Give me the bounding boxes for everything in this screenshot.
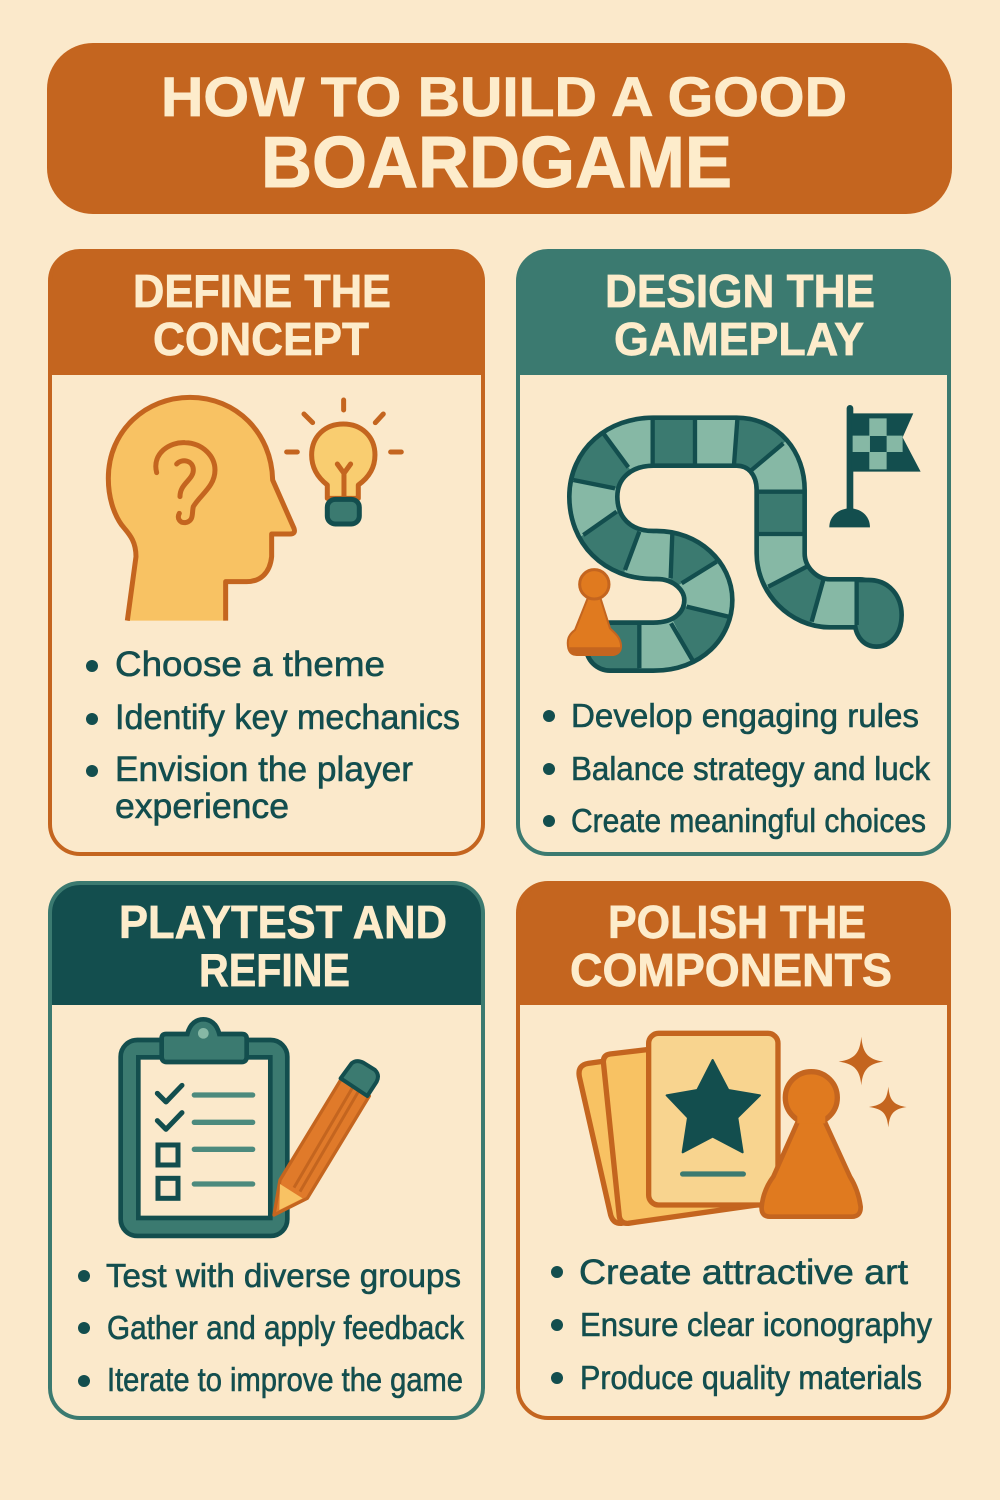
icon: head with question mark <box>108 397 294 621</box>
title banner <box>47 43 952 214</box>
bullet list: playtest and refine: Iterate to improve the game <box>107 1361 463 1398</box>
icon: clipboard checklist <box>121 1019 287 1236</box>
bullet list: define the concept: experience <box>115 787 289 826</box>
bullet list: playtest and refine <box>78 1257 464 1398</box>
panel: polish the components <box>518 883 949 1418</box>
heading: polish the components: COMPONENTS <box>570 944 892 996</box>
bullet list: define the concept <box>86 645 460 826</box>
panel: playtest and refine <box>50 883 483 1418</box>
title banner: HOW TO BUILD A GOOD <box>161 65 847 128</box>
bullet list: design the gameplay: Develop engaging rules <box>571 697 919 734</box>
heading: playtest and refine <box>119 896 447 996</box>
heading: playtest and refine: REFINE <box>199 944 350 996</box>
bullet list: design the gameplay: Balance strategy and luck <box>571 750 930 787</box>
heading: playtest and refine: PLAYTEST AND <box>119 896 447 948</box>
title banner: BOARDGAME <box>261 123 732 203</box>
panel: define the concept <box>50 251 483 854</box>
icon: light bulb <box>287 400 401 524</box>
heading: design the gameplay: DESIGN THE <box>605 265 875 317</box>
bullet list: playtest and refine: Test with diverse groups <box>106 1257 461 1294</box>
bullet list: polish the components <box>551 1253 932 1396</box>
bullet list: polish the components: Ensure clear iconography <box>580 1306 932 1343</box>
heading: polish the components <box>570 896 892 996</box>
bullet list: design the gameplay: Create meaningful choices <box>571 802 926 839</box>
icon: checkered flag <box>829 408 921 527</box>
icon: orange pawn and sparkles <box>762 1037 907 1217</box>
icon: pencil <box>274 1061 378 1215</box>
heading: define the concept: DEFINE THE <box>133 265 391 317</box>
heading: design the gameplay: GAMEPLAY <box>614 313 864 365</box>
panel: design the gameplay <box>518 251 949 854</box>
bullet list: define the concept: Identify key mechanics <box>115 698 460 737</box>
bullet list: playtest and refine: Gather and apply feedback <box>107 1309 464 1346</box>
icon: cards with star <box>579 1033 778 1223</box>
bullet list: design the gameplay <box>543 697 930 839</box>
bullet list: polish the components: Produce quality materials <box>580 1359 922 1396</box>
bullet list: define the concept: Choose a theme <box>115 645 385 684</box>
heading: design the gameplay <box>605 265 875 365</box>
bullet list: define the concept: Envision the player <box>115 750 413 789</box>
icon: board game track <box>550 413 902 673</box>
heading: define the concept <box>133 265 391 365</box>
bullet list: polish the components: Create attractive art <box>579 1253 908 1292</box>
icon: orange pawn <box>568 570 621 655</box>
heading: polish the components: POLISH THE <box>608 896 866 948</box>
heading: define the concept: CONCEPT <box>153 313 369 365</box>
